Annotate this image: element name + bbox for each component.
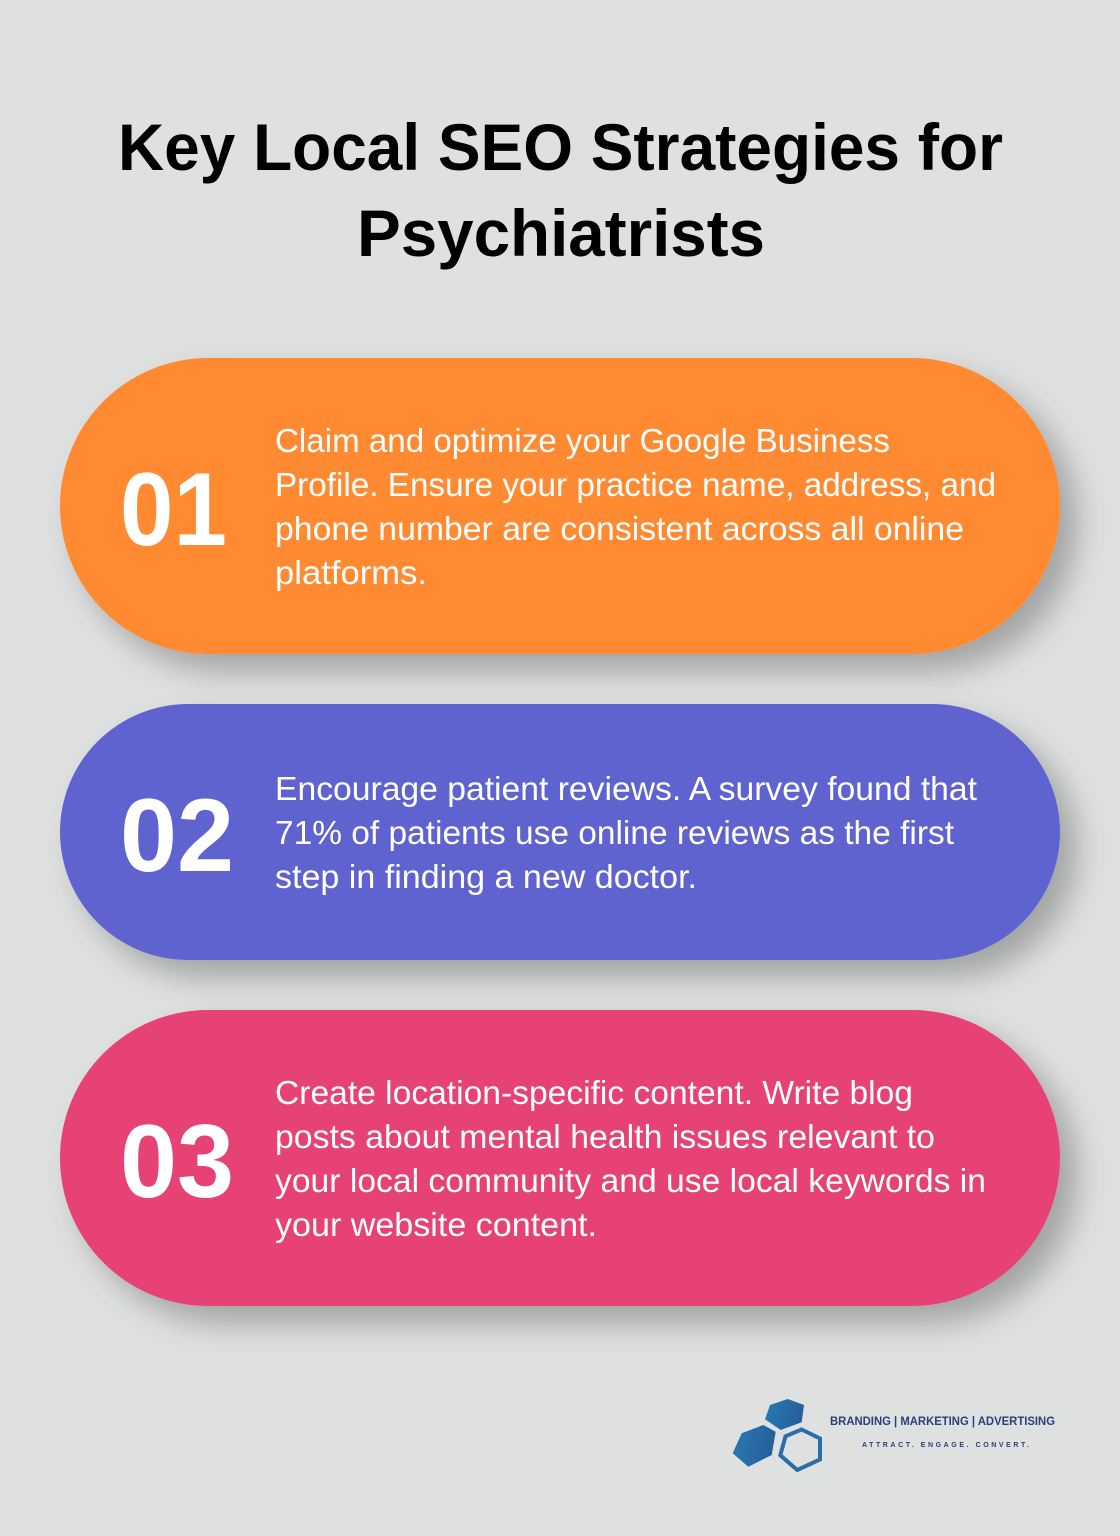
text: step 02 description: step in finding a new doctor. <box>275 858 697 895</box>
text: step 02 description <box>275 770 977 895</box>
number 03: 03 <box>120 1104 234 1220</box>
logo <box>733 1399 1055 1470</box>
text: step 02 description: 71% of patients use online reviews as the first <box>275 814 954 851</box>
title <box>118 110 1003 270</box>
number 01: 01 <box>120 452 227 568</box>
text: step 03 description: Create location-specific content. Write blog <box>275 1074 913 1111</box>
number 02: 02 <box>120 778 234 894</box>
logo tagline text: ATTRACT. ENGAGE. CONVERT. <box>862 1442 1029 1449</box>
text: step 03 description: your local community and use local keywords in <box>275 1162 986 1199</box>
text: step 01 description: Claim and optimize your Google Business <box>275 422 890 459</box>
text: step 03 description: your website content. <box>275 1206 597 1243</box>
text: step 01 description: platforms. <box>275 554 427 591</box>
text: step 01 description <box>275 422 996 591</box>
title: Psychiatrists <box>357 196 765 270</box>
text: step 02 description: Encourage patient reviews. A survey found that <box>275 770 977 807</box>
icon: hexagon logo mark <box>733 1399 820 1470</box>
logo tagline text <box>830 1416 1055 1449</box>
text: step 01 description: Profile. Ensure your practice name, address, and <box>275 466 996 503</box>
text: step 03 description: posts about mental health issues relevant to <box>275 1118 935 1155</box>
logo tagline text: BRANDING | MARKETING | ADVERTISING <box>830 1416 1055 1428</box>
panel: step 03 <box>60 1010 1060 1306</box>
text: step 01 description: phone number are consistent across all online <box>275 510 964 547</box>
text: step 03 description <box>275 1074 986 1243</box>
panel: step 01 <box>60 358 1060 654</box>
title: Key Local SEO Strategies for <box>118 110 1003 184</box>
panel: step 02 <box>60 704 1060 960</box>
